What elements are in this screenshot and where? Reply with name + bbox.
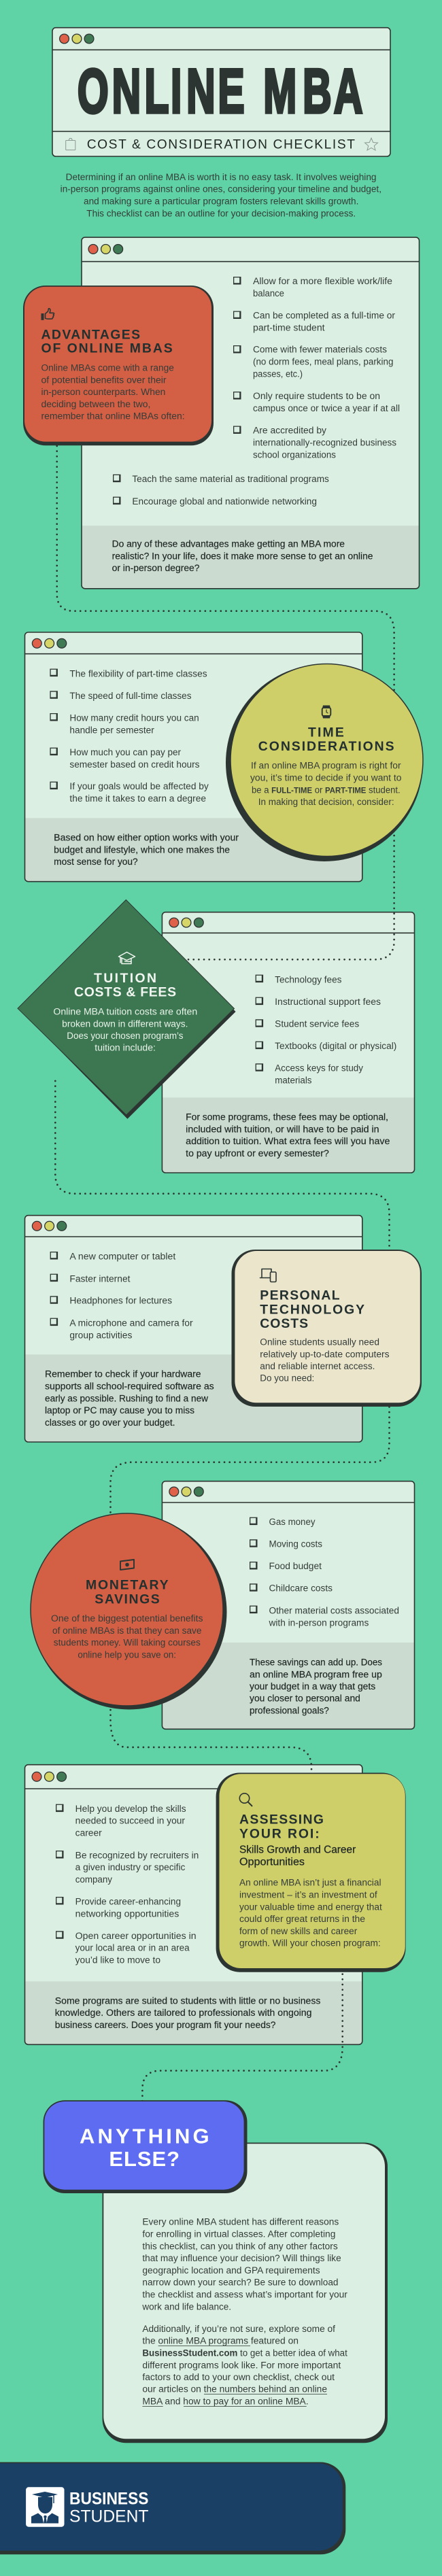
paragraph 2: BusinessStudent.com to get a better idea of what bbox=[142, 2348, 347, 2358]
item: career opportunities bbox=[56, 1931, 197, 1965]
question text: business careers. Does your program fit your needs? bbox=[55, 2020, 276, 2030]
dotted connector: tuition to anything else bbox=[55, 1081, 390, 2101]
item: career opportunities: your local area or in an area bbox=[75, 1943, 190, 1953]
header window bbox=[52, 28, 390, 156]
paragraph 1: for enrolling in virtual classes. After completing bbox=[142, 2229, 335, 2239]
item: gas: Gas money bbox=[269, 1517, 316, 1527]
item: pay per semester: How much you can pay per bbox=[69, 747, 182, 757]
body text: An online MBA isn’t just a financial bbox=[239, 1878, 381, 1888]
paragraph 2: Additionally, if you’re not sure, explore some of bbox=[142, 2324, 335, 2334]
item: skills: Help you develop the skills bbox=[75, 1804, 186, 1814]
icon: thumbs up bbox=[41, 309, 54, 320]
item: accredited bbox=[233, 426, 396, 460]
heading bbox=[74, 971, 176, 1000]
title: ONLINE MBA bbox=[78, 56, 362, 126]
body text: If an online MBA program is right for bbox=[251, 761, 401, 771]
heading: TIME bbox=[308, 725, 344, 740]
question text bbox=[250, 1657, 382, 1716]
item: childcare: Childcare costs bbox=[269, 1583, 333, 1594]
item: textbooks: Textbooks (digital or physical) bbox=[275, 1041, 396, 1051]
paragraph 1: the checklist and assess what’s important for your bbox=[142, 2289, 347, 2299]
item: access keys: Access keys for study bbox=[275, 1063, 363, 1074]
item: accredited: school organizations bbox=[253, 449, 336, 460]
heading: CONSIDERATIONS bbox=[258, 739, 394, 754]
item: other costs bbox=[250, 1605, 399, 1628]
panel: time window bbox=[24, 632, 362, 882]
intro text: Determining if an online MBA is worth it is no easy task. It involves weighing bbox=[66, 172, 376, 182]
body text: One of the biggest potential benefits bbox=[51, 1613, 203, 1624]
question text: your budget in a way that gets bbox=[250, 1681, 376, 1691]
panel: ROI window bbox=[24, 1765, 362, 2044]
question text: realistic? In your life, does it make more sense to get an online bbox=[112, 551, 373, 562]
body text: of online MBAs is that they can save bbox=[52, 1626, 201, 1636]
question text: supports all school-required software as bbox=[45, 1381, 214, 1391]
item: networking: Provide career-enhancing bbox=[75, 1897, 181, 1907]
body text: growth. Will your chosen program: bbox=[239, 1938, 381, 1948]
heading bbox=[239, 1812, 324, 1841]
item: pay per semester: semester based on credit hours bbox=[69, 759, 200, 770]
item: technology fees: Technology fees bbox=[275, 974, 342, 984]
callout: personal technology costs bbox=[231, 1250, 422, 1407]
body text: and reliable internet access. bbox=[260, 1361, 375, 1371]
intro text: in-person programs against online ones, considering your timeline and budget, bbox=[61, 184, 381, 194]
body text: you, it’s time to decide if you want to bbox=[250, 773, 401, 783]
body text: be a FULL-TIME or PART-TIME student. bbox=[252, 785, 401, 795]
callout: tuition costs and fees bbox=[18, 900, 236, 1119]
item: flexible: Allow for a more flexible work/life bbox=[253, 276, 392, 286]
body text: in-person counterparts. When bbox=[41, 387, 165, 397]
question text: Do any of these advantages make getting an MBA more bbox=[112, 539, 345, 549]
heading bbox=[41, 327, 173, 356]
panel: anything else bbox=[44, 2100, 388, 2443]
body text: of potential benefits over their bbox=[41, 375, 167, 385]
body text bbox=[51, 1613, 203, 1660]
item: full or part time: Can be completed as a full-time or bbox=[253, 310, 396, 321]
paragraph 2: different programs look like. For more important bbox=[142, 2360, 341, 2370]
question text: most sense for you? bbox=[54, 857, 138, 867]
item: same material: Teach the same material as traditional programs bbox=[132, 474, 329, 484]
callout: assessing your ROI bbox=[216, 1773, 406, 1972]
body text: deciding between the two, bbox=[41, 399, 150, 409]
icon: star bbox=[364, 138, 378, 150]
logo wordmark: BUSINESS bbox=[69, 2489, 148, 2508]
item: full-time: The speed of full-time classes bbox=[69, 691, 192, 701]
item: materials costs: (no dorm fees, meal plans, parking bbox=[253, 357, 393, 367]
item: full or part time: part-time student bbox=[253, 322, 325, 333]
item: moving: Moving costs bbox=[269, 1539, 322, 1549]
body text bbox=[239, 1878, 382, 1948]
item: accredited: internationally-recognized business bbox=[253, 437, 396, 447]
paragraph 1: geographic location and GPA requirements bbox=[142, 2265, 320, 2276]
item: microphone: group activities bbox=[69, 1330, 133, 1340]
heading: YOUR ROI: bbox=[239, 1826, 320, 1841]
panel: savings window bbox=[162, 1481, 415, 1729]
body text bbox=[260, 1337, 390, 1384]
body text: Does your chosen program’s bbox=[67, 1031, 184, 1041]
heading: MONETARY bbox=[86, 1578, 169, 1593]
logo wordmark: STUDENT bbox=[69, 2507, 148, 2526]
item: food: Food budget bbox=[269, 1561, 322, 1571]
item: credit hours: How many credit hours you can bbox=[69, 713, 199, 723]
item: materials costs: passes, etc.) bbox=[253, 369, 303, 379]
heading: OF ONLINE MBAS bbox=[41, 341, 173, 356]
heading: PERSONAL bbox=[260, 1288, 340, 1303]
paragraph 1: work and life balance. bbox=[141, 2301, 231, 2312]
heading bbox=[86, 1578, 169, 1607]
callout: anything else heading bbox=[44, 2100, 248, 2193]
panel: technology window bbox=[24, 1216, 362, 1442]
question text: professional goals? bbox=[250, 1706, 329, 1716]
body text: tuition include: bbox=[95, 1043, 156, 1053]
logo icon bbox=[26, 2487, 64, 2527]
checklist: technology bbox=[50, 1252, 193, 1340]
item: flexible: balance bbox=[253, 288, 284, 298]
paragraph 1: narrow down your search? Be sure to download bbox=[142, 2278, 339, 2288]
item: career opportunities: you’d like to move to bbox=[75, 1955, 160, 1965]
heading bbox=[258, 725, 394, 754]
item: materials costs: Come with fewer materials costs bbox=[253, 345, 387, 355]
item: skills: needed to succeed in your bbox=[75, 1816, 186, 1826]
body text: relatively up-to-date computers bbox=[260, 1349, 390, 1359]
paragraph 2: MBA and how to pay for an online MBA. bbox=[142, 2397, 309, 2407]
item: campus bbox=[233, 391, 400, 413]
checklist: tuition bbox=[256, 974, 396, 1086]
heading: COSTS & FEES bbox=[74, 985, 176, 1000]
body text: broken down in different ways. bbox=[62, 1018, 188, 1029]
body text bbox=[41, 363, 185, 422]
body text: form of new skills and career bbox=[239, 1926, 358, 1936]
question text: classes or go over your budget. bbox=[45, 1418, 175, 1428]
item: access keys bbox=[256, 1063, 363, 1086]
question text: Some programs are suited to students with little or no business bbox=[55, 1995, 321, 2006]
icon: clipboard bbox=[66, 139, 75, 150]
body text: remember that online MBAs often: bbox=[41, 411, 185, 422]
item: recruiters: company bbox=[75, 1874, 112, 1885]
item: networking bbox=[56, 1897, 181, 1919]
paragraph 1: Every online MBA student has different reasons bbox=[142, 2217, 339, 2227]
item: networking: networking opportunities bbox=[75, 1908, 180, 1919]
subheading: Opportunities bbox=[239, 1856, 305, 1868]
intro text bbox=[61, 172, 381, 218]
body text bbox=[250, 761, 401, 807]
body text bbox=[53, 1006, 197, 1053]
heading: ASSESSING bbox=[239, 1812, 324, 1827]
question text: you closer to personal and bbox=[250, 1694, 360, 1704]
item: microphone: A microphone and camera for bbox=[69, 1318, 193, 1328]
question text: For some programs, these fees may be optional, bbox=[186, 1112, 388, 1122]
subheading: Skills Growth and Career bbox=[239, 1844, 356, 1856]
question text bbox=[55, 1995, 321, 2030]
heading: SAVINGS bbox=[95, 1592, 160, 1607]
paragraph 1: that may influence your decision? Will things like bbox=[142, 2253, 341, 2263]
item: skills: career bbox=[75, 1828, 102, 1838]
panel: tuition window bbox=[162, 912, 415, 1173]
icon: laptop and phone bbox=[260, 1269, 276, 1282]
item: goals: If your goals would be affected by bbox=[69, 781, 209, 791]
logo wordmark bbox=[69, 2489, 148, 2526]
item: other costs: with in-person programs bbox=[268, 1617, 369, 1628]
item: part-time: The flexibility of part-time classes bbox=[69, 668, 207, 679]
question text: laptop or PC may cause you to miss bbox=[45, 1405, 194, 1415]
icon: watch bbox=[322, 706, 330, 718]
question text: to pay upfront or every semester? bbox=[186, 1148, 329, 1158]
item: goals: the time it takes to earn a degree bbox=[69, 793, 206, 804]
question text bbox=[45, 1369, 214, 1428]
item: other costs: Other material costs associated bbox=[269, 1605, 399, 1615]
body text: online help you save on: bbox=[78, 1650, 176, 1660]
item: networking: Encourage global and nationwide networking bbox=[132, 496, 317, 506]
item: credit hours bbox=[50, 713, 199, 735]
body text: could offer great returns in the bbox=[239, 1914, 365, 1924]
item: microphone bbox=[50, 1318, 193, 1340]
dotted connector: advantages to tuition bbox=[57, 446, 394, 959]
body text: your valuable time and energy that bbox=[239, 1902, 382, 1912]
icon: magnifier bbox=[239, 1793, 252, 1806]
item: computer: A new computer or tablet bbox=[69, 1252, 176, 1262]
body text: Online MBAs come with a range bbox=[41, 363, 174, 373]
item: accredited: Are accredited by bbox=[253, 426, 326, 436]
question text bbox=[186, 1112, 390, 1158]
heading: ADVANTAGES bbox=[41, 327, 140, 342]
footer band bbox=[0, 2462, 345, 2554]
item: goals bbox=[50, 781, 209, 804]
item: service fees: Student service fees bbox=[275, 1018, 360, 1029]
question text bbox=[112, 539, 373, 573]
question text: included with tuition, or will have to be paid in bbox=[186, 1124, 379, 1134]
heading: TECHNOLOGY bbox=[260, 1302, 364, 1317]
intro text: and making sure a particular program fosters relevant skills growth. bbox=[84, 196, 358, 207]
question text: an online MBA program free up bbox=[250, 1669, 382, 1679]
checklist: savings bbox=[250, 1517, 399, 1628]
question text: addition to tuition. What extra fees will you have bbox=[186, 1136, 390, 1146]
item: headphones: Headphones for lectures bbox=[69, 1296, 172, 1306]
item: access keys: materials bbox=[275, 1076, 312, 1086]
question text: Remember to check if your hardware bbox=[45, 1369, 201, 1379]
heading: TUITION bbox=[94, 971, 156, 986]
item: internet: Faster internet bbox=[69, 1273, 131, 1284]
callout: anything else heading: ANYTHING bbox=[80, 2124, 209, 2148]
item: support fees: Instructional support fees bbox=[275, 997, 381, 1007]
item: pay per semester bbox=[50, 747, 200, 770]
body text: Do you need: bbox=[260, 1373, 314, 1384]
callout: monetary savings bbox=[31, 1513, 227, 1709]
item: career opportunities: Open career opportunities in bbox=[75, 1931, 197, 1941]
callout: advantages of online MBAs bbox=[23, 286, 214, 445]
checklist: advantages bbox=[113, 276, 400, 506]
checklist: time bbox=[50, 668, 209, 804]
paragraph 2 bbox=[142, 2324, 347, 2407]
question text: knowledge. Others are tailored to professionals with ongoing bbox=[55, 2008, 312, 2018]
paragraph 2: the online MBA programs featured on bbox=[142, 2336, 299, 2346]
item: recruiters: a given industry or specific bbox=[75, 1862, 186, 1872]
body text: Online students usually need bbox=[260, 1337, 379, 1347]
subtitle: COST & CONSIDERATION CHECKLIST bbox=[87, 137, 355, 152]
body text: Online MBA tuition costs are often bbox=[53, 1006, 197, 1016]
heading bbox=[260, 1288, 364, 1331]
paragraph 1 bbox=[141, 2217, 347, 2312]
callout: time considerations bbox=[226, 664, 423, 861]
item: recruiters: Be recognized by recruiters in bbox=[75, 1850, 199, 1860]
paragraph 1: this checklist, can you think of any other factors bbox=[142, 2241, 338, 2251]
panel: advantages window bbox=[82, 237, 419, 589]
heading: COSTS bbox=[260, 1316, 308, 1331]
item: recruiters bbox=[56, 1850, 199, 1885]
question text: These savings can add up. Does bbox=[250, 1657, 382, 1667]
callout: anything else heading: ELSE? bbox=[109, 2147, 180, 2171]
item: full or part time bbox=[233, 310, 396, 333]
body text: In making that decision, consider: bbox=[258, 797, 394, 807]
paragraph 2: our articles on the numbers behind an online bbox=[142, 2384, 327, 2394]
paragraph 2: factors to add to your own checklist, check out bbox=[142, 2372, 335, 2382]
item: credit hours: handle per semester bbox=[69, 725, 154, 735]
item: skills bbox=[56, 1804, 186, 1838]
checklist: ROI bbox=[56, 1804, 199, 1965]
question text: early as possible. Rushing to find a new bbox=[45, 1393, 208, 1403]
question text bbox=[54, 833, 239, 867]
question text: Based on how either option works with your bbox=[54, 833, 239, 843]
question text: or in-person degree? bbox=[112, 563, 200, 573]
item: campus: campus once or twice a year if at all bbox=[253, 403, 400, 413]
intro text: This checklist can be an outline for your decision-making process. bbox=[86, 208, 356, 218]
body text: students money. Will taking courses bbox=[54, 1638, 201, 1648]
item: flexible bbox=[233, 276, 392, 298]
question text: budget and lifestyle, which one makes the bbox=[54, 844, 230, 855]
body text: investment – it’s an investment of bbox=[239, 1890, 377, 1900]
icon: graduation cap bbox=[118, 952, 135, 964]
item: materials costs bbox=[233, 345, 393, 379]
subheading bbox=[239, 1844, 356, 1868]
icon: banknote bbox=[120, 1560, 134, 1570]
item: campus: Only require students to be on bbox=[253, 391, 380, 401]
